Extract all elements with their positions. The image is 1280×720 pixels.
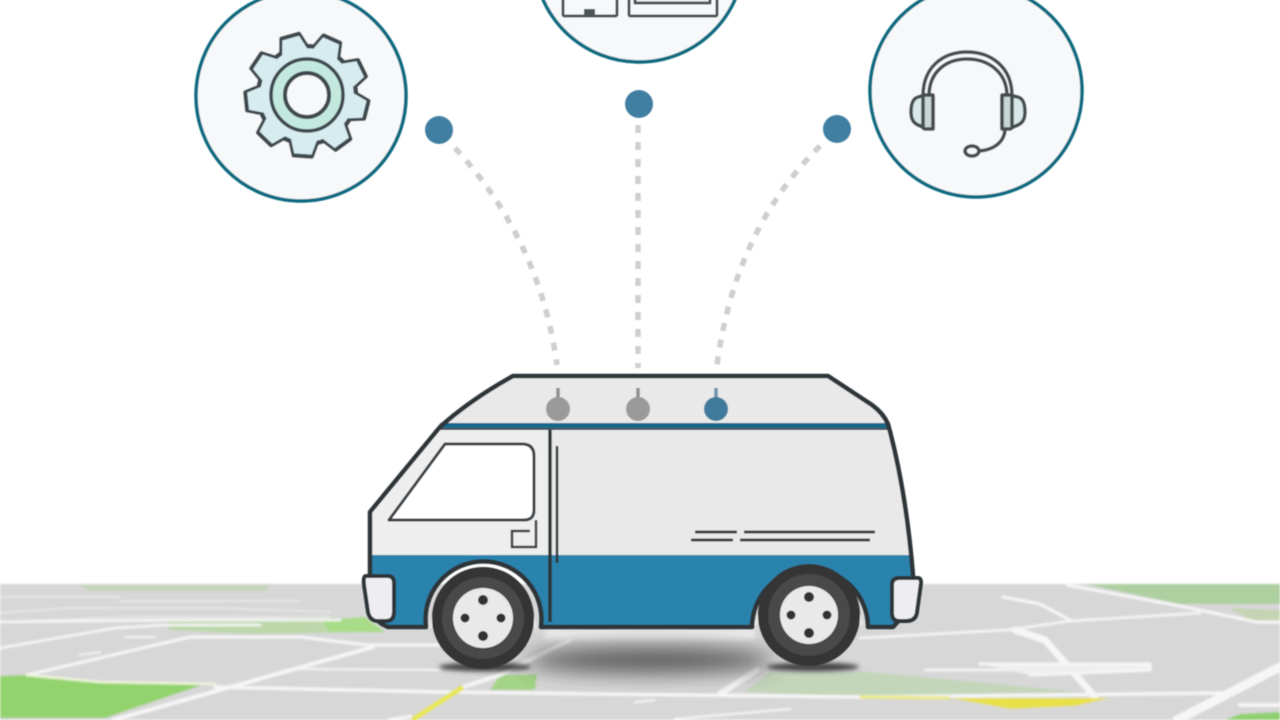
door handle [512, 520, 536, 547]
map roads [0, 585, 1280, 720]
panel: devices circle [534, 0, 744, 62]
door lines [550, 430, 557, 622]
panel: gear circle [196, 0, 406, 201]
side speed stripes [691, 532, 875, 540]
right bumper [892, 578, 921, 621]
yellow road highlights [388, 687, 1110, 720]
connector: left dotted path [455, 148, 557, 365]
icon: gear [245, 33, 370, 157]
connector: centre dotted path [635, 125, 641, 368]
van cab panel [372, 430, 549, 555]
map green areas [0, 584, 1280, 720]
node: centre dot [625, 90, 653, 118]
van outline [370, 376, 913, 627]
van [364, 376, 921, 669]
node: right dot [823, 115, 851, 143]
connector: right dotted path [717, 146, 820, 365]
map ground [0, 584, 1280, 720]
left bumper [364, 576, 394, 621]
sensor: blue right [704, 388, 728, 421]
panel: headset circle [870, 0, 1082, 197]
icon: headset [911, 52, 1025, 156]
rear wheel [756, 564, 862, 666]
front wheel [430, 567, 536, 669]
van body [370, 376, 913, 627]
van lower blue band [371, 554, 912, 626]
sensor: grey centre [626, 388, 650, 421]
node: left dot [425, 116, 453, 144]
side window [389, 444, 534, 520]
icon: devices [563, 0, 717, 16]
roof stripe [440, 426, 889, 429]
van ground shadow [439, 628, 859, 673]
sensor: grey left [546, 388, 570, 421]
